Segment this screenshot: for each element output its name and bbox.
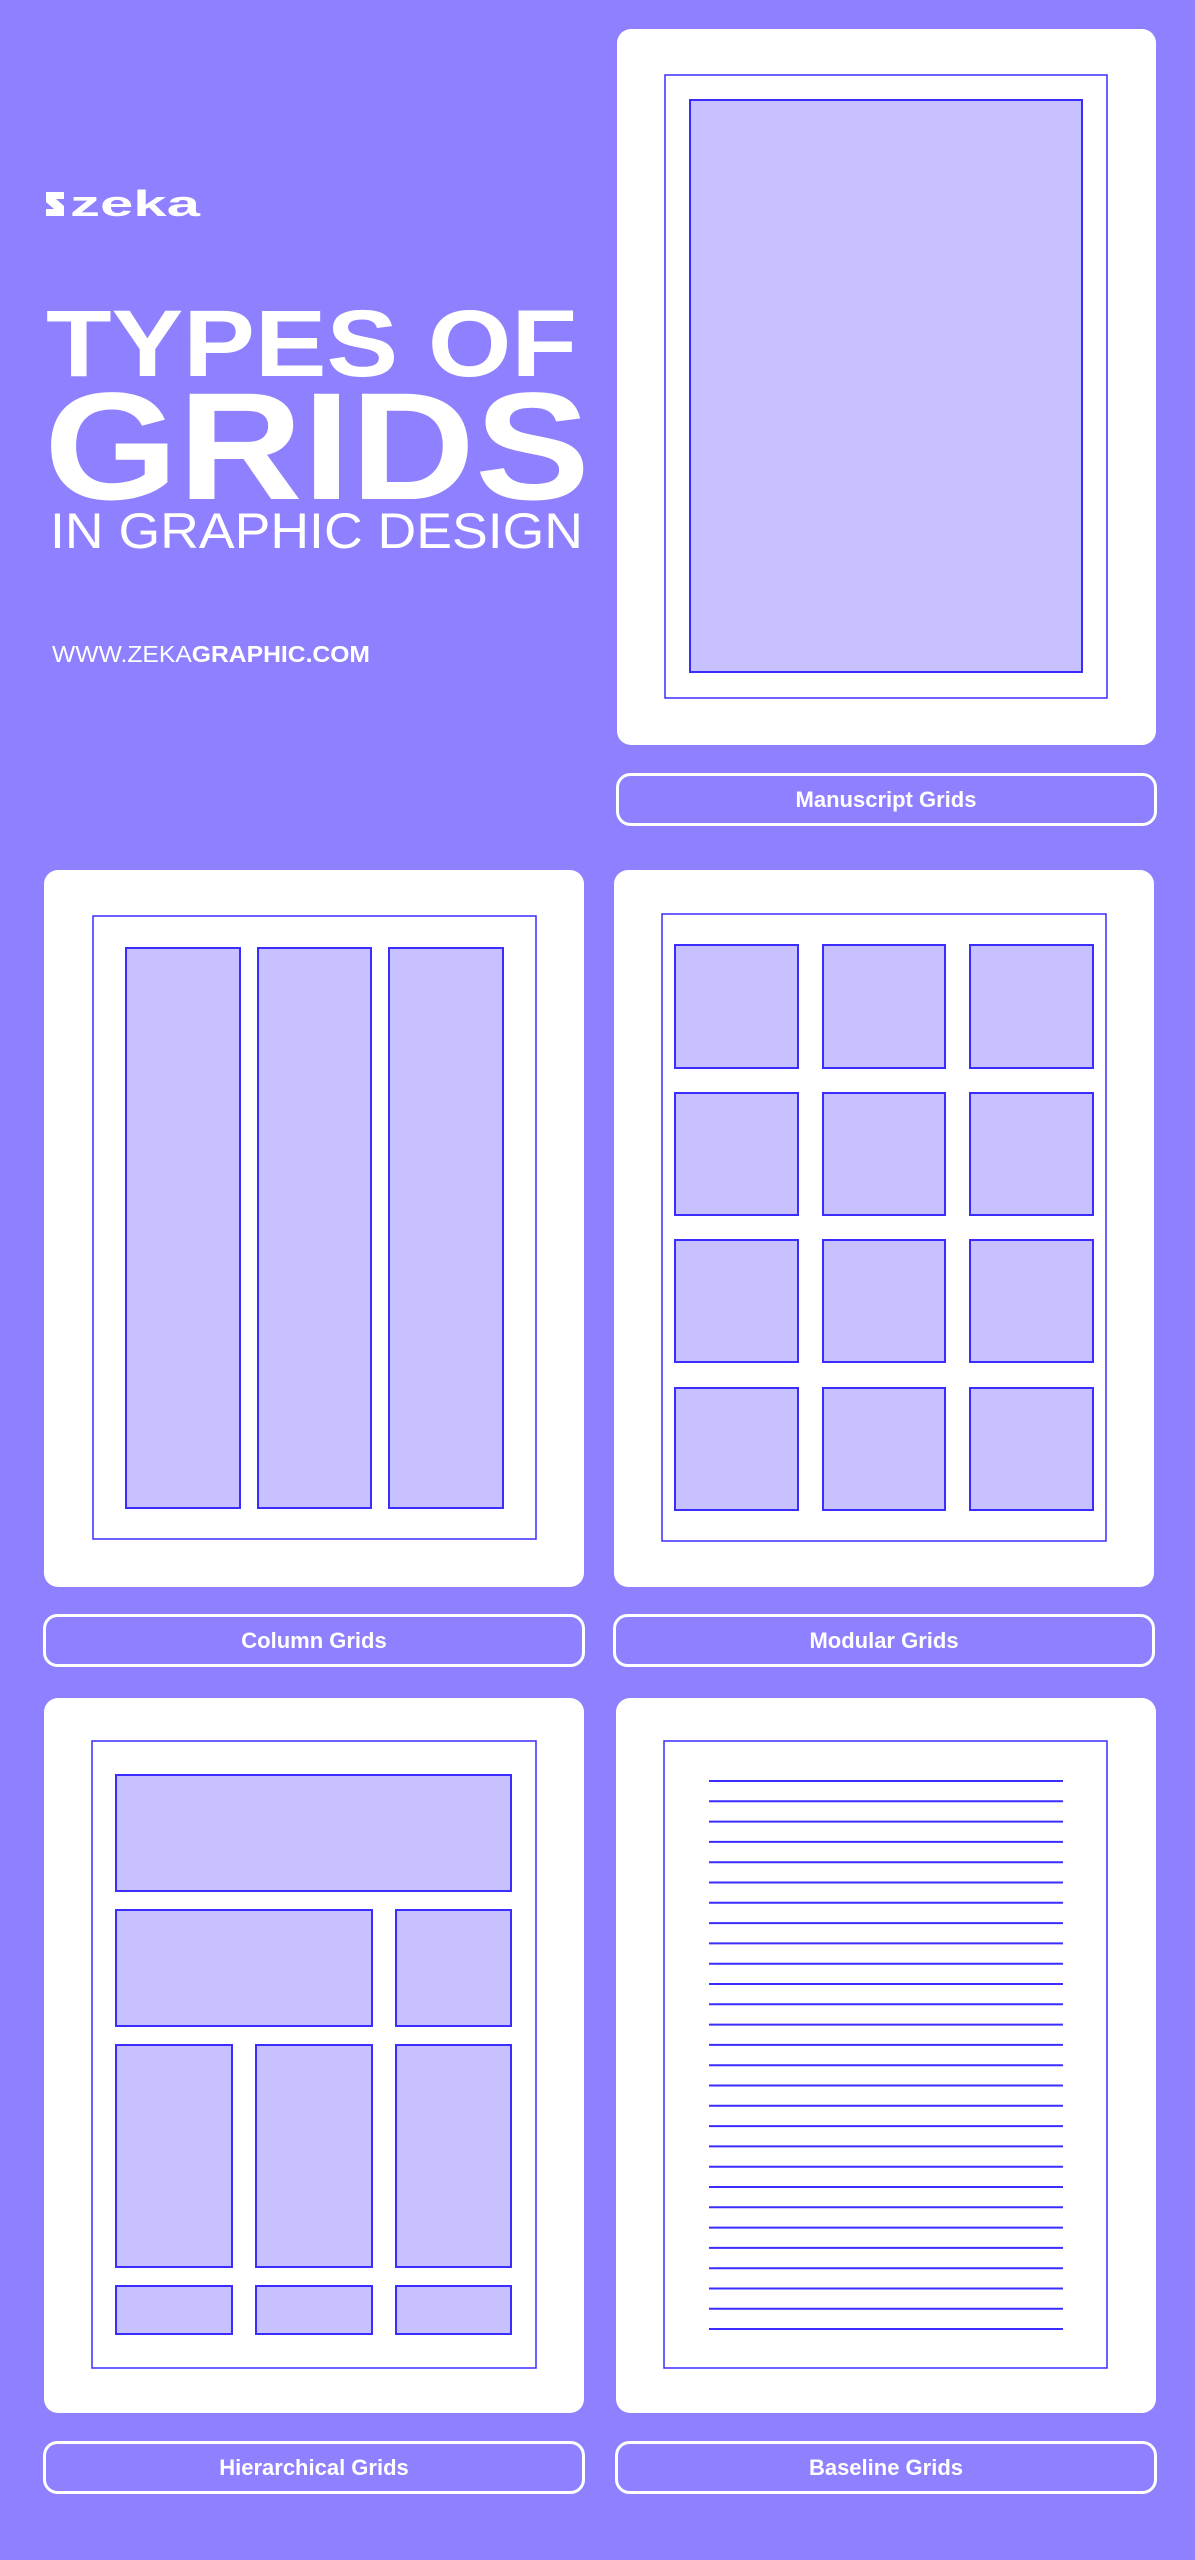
label: column grids — [44, 1616, 584, 1666]
title: TYPES OF — [46, 291, 577, 397]
panel: hierarchical grid — [44, 1698, 584, 2413]
title: IN GRAPHIC DESIGN — [50, 503, 583, 559]
label: hierarchical grids: Hierarchical Grids — [219, 2455, 409, 2480]
label: modular grids: Modular Grids — [809, 1628, 959, 1653]
panel: modular grid — [614, 870, 1154, 1587]
label: hierarchical grids — [44, 2442, 584, 2492]
website url: WWW.ZEKA GRAPHIC.COM — [52, 641, 370, 667]
label: column grids: Column Grids — [241, 1628, 387, 1653]
logo: zeka — [70, 183, 202, 224]
panel: manuscript grid — [617, 29, 1156, 745]
label: manuscript grids — [618, 774, 1156, 824]
label: baseline grids — [616, 2442, 1156, 2492]
label: manuscript grids: Manuscript Grids — [796, 787, 976, 812]
panel: baseline grid — [616, 1698, 1156, 2413]
label: baseline grids: Baseline Grids — [809, 2455, 963, 2480]
logo — [46, 183, 202, 224]
title: GRIDS — [44, 361, 590, 532]
panel: column grid — [44, 870, 584, 1587]
label: modular grids — [614, 1616, 1154, 1666]
title — [44, 291, 590, 559]
